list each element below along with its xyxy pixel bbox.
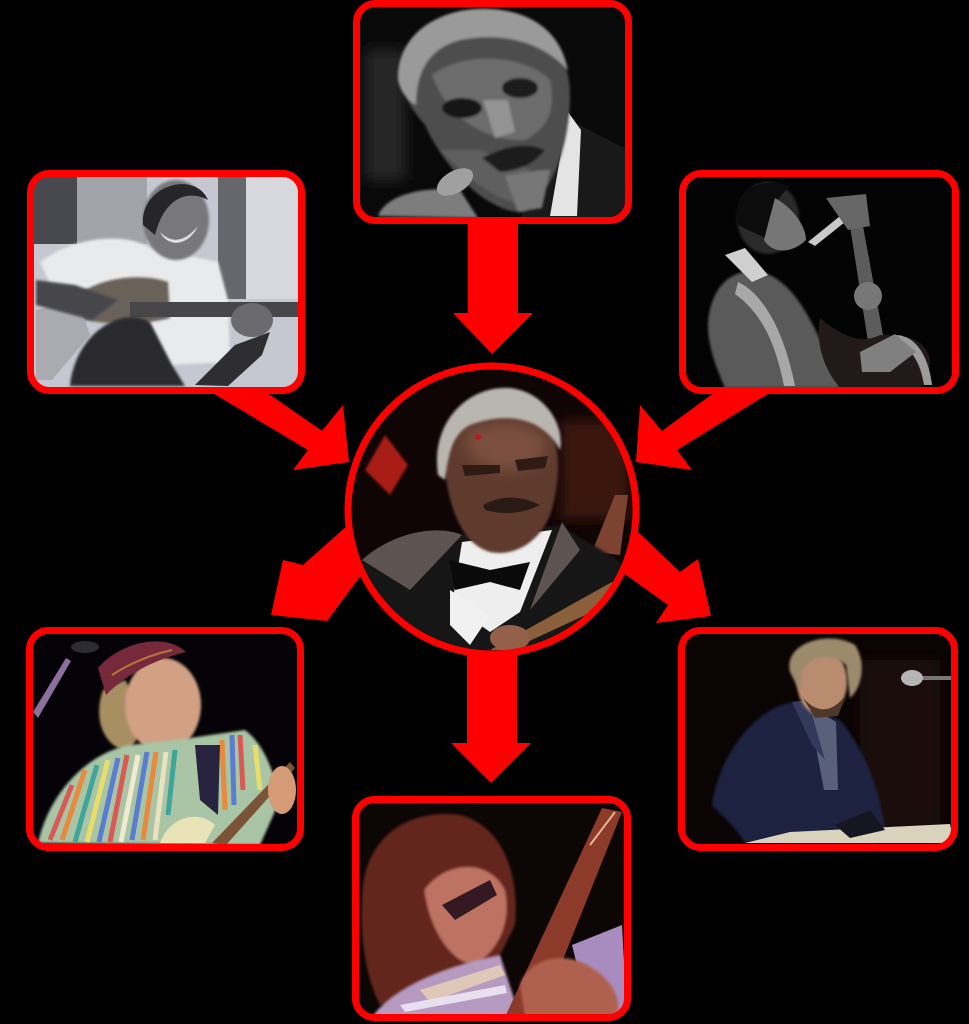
face	[424, 867, 507, 965]
forehead mark	[475, 434, 481, 440]
arm and hand	[36, 280, 118, 320]
guitar	[745, 824, 954, 843]
head	[445, 401, 558, 553]
hair	[97, 679, 138, 749]
face	[797, 648, 847, 716]
eyes and mouth	[462, 465, 500, 476]
arrow: upper-right portrait to centre	[636, 392, 771, 470]
legs	[70, 317, 185, 386]
guitar body	[819, 318, 930, 388]
panel: lower-left portrait	[30, 630, 300, 848]
hands	[854, 282, 882, 310]
hair	[789, 639, 862, 698]
bandana	[98, 641, 186, 695]
face	[125, 658, 201, 752]
head	[398, 9, 570, 212]
head	[143, 180, 209, 260]
guitar neck and headstock	[850, 226, 884, 342]
glasses shadow	[442, 880, 497, 920]
hand	[268, 766, 296, 814]
guitar	[490, 582, 618, 650]
panel: bottom portrait	[356, 800, 628, 1018]
panel: upper-left portrait	[30, 174, 302, 390]
hair	[437, 388, 561, 480]
hand and microphone	[378, 189, 478, 218]
strap	[808, 217, 844, 246]
shirt	[38, 730, 280, 845]
jacket	[522, 124, 625, 217]
shirt	[452, 530, 552, 632]
panel: upper-right portrait	[682, 174, 956, 390]
shirt and tie	[812, 712, 838, 790]
guitar	[160, 817, 215, 843]
jacket	[345, 525, 640, 657]
jacket	[706, 271, 839, 387]
head	[737, 182, 799, 254]
guitar neck	[505, 808, 622, 1017]
microphone stand	[33, 658, 71, 718]
guitar	[75, 277, 170, 324]
bow tie	[449, 560, 530, 590]
arrow: centre to lower-left portrait	[271, 525, 362, 621]
arrow: centre to bottom portrait	[451, 645, 531, 783]
jacket	[712, 702, 885, 843]
hair	[362, 814, 516, 1005]
shirt	[550, 112, 581, 216]
panel: top portrait	[356, 4, 628, 220]
arrow: centre to lower-right portrait	[622, 530, 711, 623]
arrow: top portrait to centre	[453, 222, 533, 354]
hand	[520, 958, 618, 1017]
panel: centre portrait	[345, 363, 640, 657]
panel: lower-right portrait	[682, 630, 955, 848]
shirt	[372, 955, 520, 1017]
arrow: upper-left portrait to centre	[211, 392, 349, 470]
microphone	[922, 676, 951, 680]
body	[40, 239, 230, 365]
